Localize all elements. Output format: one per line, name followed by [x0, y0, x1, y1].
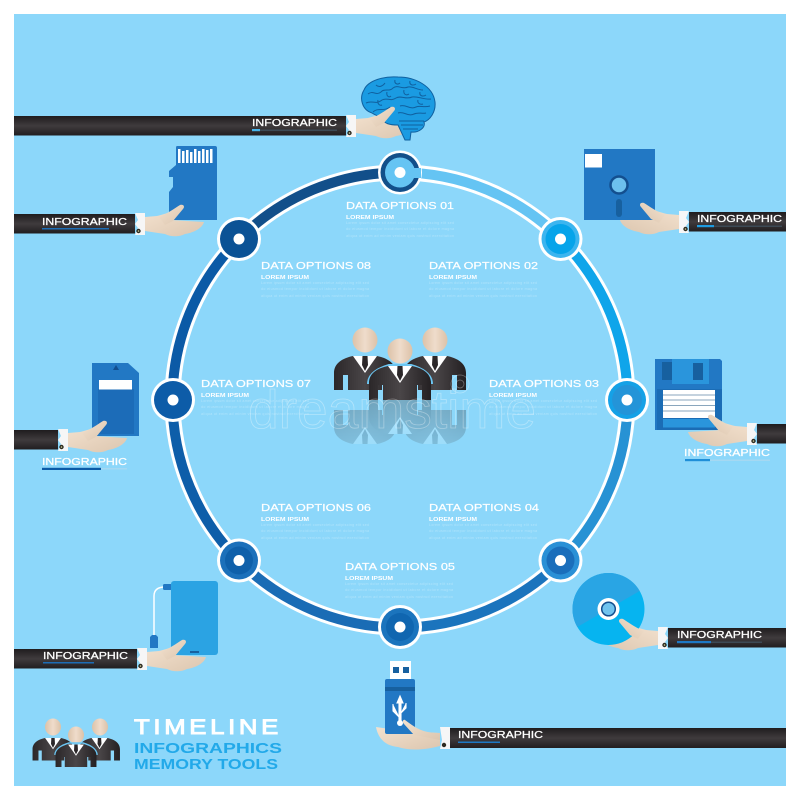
text block: data options 08 — [261, 261, 372, 298]
text block: data options 03: LOREM IPSUM — [489, 393, 538, 399]
title: INFOGRAPHICS — [134, 740, 282, 757]
text block: data options 07 — [201, 379, 312, 416]
text block: data options 02: LOREM IPSUM — [429, 275, 478, 281]
text block: data options 04: LOREM IPSUM — [429, 517, 478, 523]
label: INFOGRAPHIC — [677, 630, 762, 641]
node 3 — [605, 378, 649, 422]
node 1 — [378, 150, 422, 194]
text block: data options 07: LOREM IPSUM — [201, 393, 250, 399]
text block: data options 02: Lorem ipsum dolor sit amet consectetur adipiscing elit sed — [429, 281, 537, 285]
text block: data options 05: LOREM IPSUM — [345, 576, 394, 582]
sleeve — [14, 116, 346, 136]
text block: data options 04: DATA OPTIONS 04 — [429, 503, 540, 514]
label: INFOGRAPHIC — [697, 214, 782, 225]
text block: data options 08: LOREM IPSUM — [261, 275, 310, 281]
node 8 — [217, 217, 261, 261]
text block: data options 05: do eiusmod tempor incididunt ut labore et dolore magna — [345, 588, 453, 592]
text block: data options 04: do eiusmod tempor incididunt ut labore et dolore magna — [429, 529, 537, 533]
text block: data options 01: aliqua ut enim ad minim veniam quis nostrud exercitation — [346, 234, 454, 238]
text block: data options 06: do eiusmod tempor incididunt ut labore et dolore magna — [261, 529, 369, 533]
reflection of team icon — [334, 400, 466, 444]
text block: data options 06 — [261, 503, 372, 540]
sleeve — [14, 649, 137, 668]
text block: data options 01: LOREM IPSUM — [346, 215, 395, 221]
text block: data options 06: Lorem ipsum dolor sit amet consectetur adipiscing elit sed — [261, 523, 369, 527]
icon: SD card — [92, 363, 139, 436]
node 5 — [378, 605, 422, 649]
icon: diskette — [655, 359, 722, 430]
logo: small team icon — [33, 718, 120, 767]
sleeve — [450, 728, 786, 748]
text block: data options 06: DATA OPTIONS 06 — [261, 503, 372, 514]
arm and brain — [14, 77, 435, 140]
arm and diskette — [655, 359, 786, 461]
text block: data options 03: Lorem ipsum dolor sit amet consectetur adipiscing elit sed — [489, 399, 597, 403]
node 4 — [538, 538, 582, 582]
text block: data options 08: do eiusmod tempor incididunt ut labore et dolore magna — [261, 287, 369, 291]
text block: data options 08: aliqua ut enim ad minim veniam quis nostrud exercitation — [261, 294, 369, 298]
sleeve — [689, 212, 786, 232]
text block: data options 02: aliqua ut enim ad minim veniam quis nostrud exercitation — [429, 294, 537, 298]
ring timeline — [151, 150, 649, 649]
text block: data options 04: Lorem ipsum dolor sit amet consectetur adipiscing elit sed — [429, 523, 537, 527]
text block: data options 04 — [429, 503, 540, 540]
text block: data options 05: aliqua ut enim ad minim veniam quis nostrud exercitation — [345, 595, 453, 599]
text block: data options 02: DATA OPTIONS 02 — [429, 261, 539, 272]
arm and SD card — [14, 363, 139, 470]
text block: data options 03: DATA OPTIONS 03 — [489, 379, 600, 390]
text block: data options 05: Lorem ipsum dolor sit amet consectetur adipiscing elit sed — [345, 582, 453, 586]
node 2 — [538, 217, 582, 261]
text block: data options 02 — [429, 261, 539, 298]
watermark: dreamstime — [248, 380, 536, 440]
arm and floppy disk — [584, 149, 786, 234]
text block: data options 02: do eiusmod tempor incididunt ut labore et dolore magna — [429, 287, 537, 291]
text block: data options 03: do eiusmod tempor incididunt ut labore et dolore magna — [489, 405, 597, 409]
label: INFOGRAPHIC — [252, 118, 337, 129]
arm and external hard drive — [14, 581, 218, 671]
text block: data options 05 — [345, 562, 456, 599]
text block: data options 07: aliqua ut enim ad minim veniam quis nostrud exercitation — [201, 412, 309, 416]
label: INFOGRAPHIC — [458, 730, 543, 741]
title: TIMELINE — [134, 716, 282, 739]
text block: data options 03: aliqua ut enim ad minim veniam quis nostrud exercitation — [489, 412, 597, 416]
text block: data options 08: Lorem ipsum dolor sit amet consectetur adipiscing elit sed — [261, 281, 369, 285]
arm and micro SD card — [14, 146, 217, 236]
icon: USB drive — [385, 661, 415, 734]
icon: micro SD card — [169, 146, 217, 220]
text block: data options 07: do eiusmod tempor incididunt ut labore et dolore magna — [201, 405, 309, 409]
title: MEMORY TOOLS — [134, 756, 278, 773]
icon: 5.25 floppy disk — [584, 149, 655, 220]
title — [134, 716, 282, 773]
node 7 — [151, 378, 195, 422]
arm and USB drive — [376, 661, 786, 750]
node 6 — [217, 538, 261, 582]
label: INFOGRAPHIC — [43, 651, 128, 662]
text block: data options 08: DATA OPTIONS 08 — [261, 261, 372, 272]
sleeve — [668, 628, 786, 648]
sleeve — [757, 424, 786, 444]
icon: brain — [362, 77, 435, 140]
icon: external hard drive — [150, 581, 218, 655]
hand — [376, 727, 440, 750]
text block: data options 06: LOREM IPSUM — [261, 517, 310, 523]
sleeve — [14, 430, 58, 450]
text block: data options 03 — [489, 379, 600, 416]
icon: CD — [572, 573, 644, 645]
text block: data options 04: aliqua ut enim ad minim veniam quis nostrud exercitation — [429, 536, 537, 540]
label: INFOGRAPHIC — [684, 448, 770, 459]
label: INFOGRAPHIC — [42, 457, 127, 468]
arm and CD — [572, 573, 786, 650]
text block: data options 01: do eiusmod tempor incididunt ut labore et dolore magna — [346, 227, 454, 231]
text block: data options 07: DATA OPTIONS 07 — [201, 379, 312, 390]
text block: data options 01: Lorem ipsum dolor sit amet consectetur adipiscing elit sed — [346, 221, 454, 225]
text block: data options 06: aliqua ut enim ad minim veniam quis nostrud exercitation — [261, 536, 369, 540]
text block: data options 01: DATA OPTIONS 01 — [346, 201, 455, 212]
sleeve — [14, 214, 135, 234]
text block: data options 05: DATA OPTIONS 05 — [345, 562, 456, 573]
icon: business team — [334, 328, 466, 400]
label: INFOGRAPHIC — [42, 217, 127, 228]
text block: data options 07: Lorem ipsum dolor sit amet consectetur adipiscing elit sed — [201, 399, 309, 403]
text block: data options 01 — [346, 201, 455, 238]
